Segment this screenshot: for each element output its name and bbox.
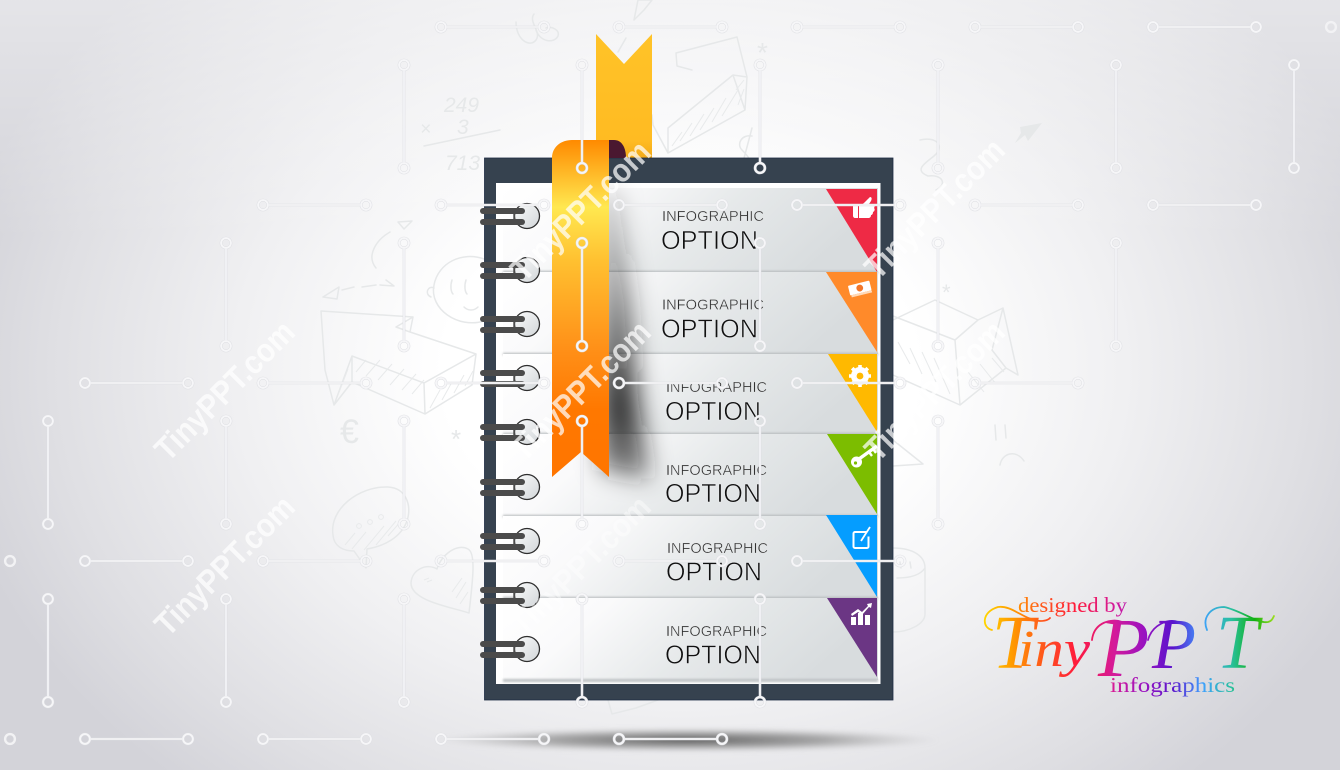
background top glow — [0, 0, 1340, 240]
doodle: speech bubble — [333, 487, 409, 568]
label: option 4: INFOGRAPHIC — [666, 462, 767, 479]
ring 1 — [480, 204, 540, 228]
panel: option 5 — [503, 515, 878, 599]
doodle: star left: * — [451, 424, 461, 454]
ring 5 — [480, 420, 540, 444]
panel: option 2 — [503, 272, 878, 355]
doodle: small arrow top — [618, 0, 652, 52]
triangle: orange — [826, 272, 877, 352]
label: option 3: INFOGRAPHIC — [666, 379, 767, 396]
logo script: PPT — [1097, 601, 1263, 695]
doodle: sum line — [424, 130, 500, 146]
panel: option 4 — [503, 434, 878, 517]
ring 4 — [480, 366, 540, 390]
logo script: PPT: P — [1097, 602, 1149, 695]
watermarks — [147, 131, 1012, 643]
label: option 2: INFOGRAPHIC — [662, 296, 764, 314]
label: option 5: INFOGRAPHIC — [667, 540, 768, 557]
logo script: PPT: T — [1216, 601, 1263, 685]
watermark 2: TinyPPT.com — [147, 488, 302, 643]
doodle: box bottom — [608, 700, 658, 714]
label: option 6: INFOGRAPHIC — [666, 623, 767, 640]
ring 7 — [480, 528, 540, 554]
doodle: left arrow — [321, 311, 476, 414]
doodle: ledger right — [893, 440, 923, 466]
logo: designed by TinyPPT infographics — [985, 593, 1274, 697]
spiral binding — [480, 204, 540, 662]
logo line: infographics: infographics — [1110, 673, 1235, 697]
ring 6 — [480, 474, 540, 500]
doodle: scribbles top — [516, 14, 558, 43]
doodle: smiling face — [427, 257, 484, 323]
ring 9 — [480, 636, 540, 662]
doodle: filled arrow right — [1015, 123, 1042, 143]
doodle: cylinder — [893, 548, 925, 632]
icon: thumbs up — [853, 197, 875, 218]
panel: option 6 — [503, 598, 878, 682]
ring 3 — [480, 312, 540, 336]
panel: option 3: OPTION — [665, 396, 761, 426]
watermark 5: TinyPPT.com — [503, 488, 658, 643]
doodle: handwritten numbers: 3 — [457, 116, 469, 139]
watermark 6: TinyPPT.com — [857, 131, 1012, 286]
panel: option 6: OPTION — [665, 640, 761, 670]
logo line: designed by: designed by — [1018, 593, 1128, 617]
logo script: PPT: P — [1151, 604, 1196, 684]
watermark 4: TinyPPT.com — [503, 313, 658, 468]
watermark 1: TinyPPT.com — [147, 313, 302, 468]
icon: key — [851, 446, 877, 468]
doodle: heart — [411, 547, 473, 613]
ground shadow — [436, 728, 940, 752]
watermark 3: TinyPPT.com — [503, 133, 658, 288]
label: option 1: INFOGRAPHIC — [662, 208, 764, 225]
icon: banknote — [848, 281, 872, 298]
icon: gear — [849, 365, 871, 387]
watermark 7: TinyPPT.com — [857, 313, 1012, 468]
panel: option 4: OPTION — [665, 478, 761, 508]
panel: option 1: OPTION — [661, 225, 758, 255]
doodle: handwritten numbers: 249 — [443, 94, 479, 117]
panel: option 1 — [503, 188, 878, 273]
doodle: handwritten numbers: × — [420, 119, 431, 140]
triangle: purple — [827, 598, 877, 677]
icon: edit note — [854, 527, 870, 548]
doodle: dashed arrows — [323, 221, 412, 299]
ribbon shadow — [600, 190, 650, 480]
logo script: Tiny: T — [992, 601, 1039, 685]
icon: bar chart — [851, 603, 872, 625]
logo script: Tiny: iny — [1018, 621, 1091, 678]
doodle: euro sign: € — [340, 413, 359, 451]
panel: option 2: OPTION — [661, 314, 758, 344]
logo swashes — [985, 607, 1274, 640]
doodle: top arrow — [652, 37, 747, 153]
doodle: handwritten numbers — [420, 94, 480, 175]
ribbon front — [552, 140, 609, 477]
panel: option 3 — [503, 354, 878, 435]
doodle: sad face — [995, 425, 1024, 465]
ring 8 — [480, 582, 540, 608]
ribbon back — [596, 34, 652, 160]
doodle: star right: * — [942, 280, 951, 305]
panel: option 5: OPTION — [666, 556, 762, 586]
doodle: star top: * — [757, 37, 768, 68]
notebook cover — [484, 158, 893, 700]
notebook page — [496, 183, 880, 684]
logo script: Tiny — [992, 601, 1091, 685]
doodle: handwritten numbers: 713 — [445, 152, 480, 175]
triangle: blue — [826, 515, 877, 597]
doodle: cent sign — [740, 128, 752, 166]
ring 2 — [480, 258, 540, 282]
doodle sketches — [321, 0, 1042, 714]
ribbon curl — [600, 140, 626, 158]
triangle: green — [827, 434, 877, 514]
doodle: curls right — [920, 139, 942, 190]
triangle: red — [826, 189, 877, 272]
triangle: yellow — [828, 354, 877, 432]
doodle: right arrow — [893, 300, 1018, 405]
